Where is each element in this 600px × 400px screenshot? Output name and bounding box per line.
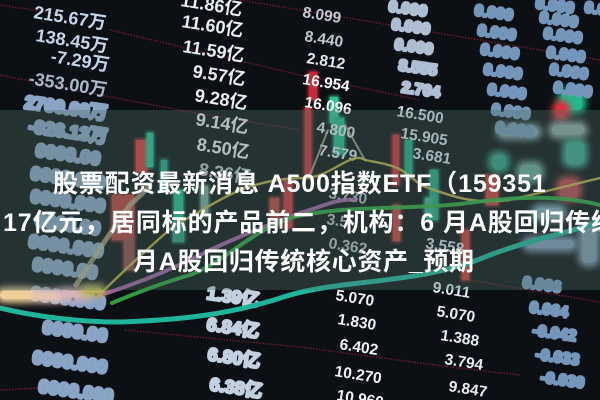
left column figures — [27, 2, 111, 100]
out-of-focus right column rows: 0.000 — [552, 79, 593, 101]
out-of-focus left column rows: 0000.00 — [34, 210, 102, 239]
third column figures: 10.270 — [333, 363, 383, 387]
third column figures: 8.440 — [303, 28, 344, 51]
out-of-focus left column rows: 0000.000 — [29, 163, 107, 193]
third column figures: 6.402 — [338, 336, 379, 359]
out-of-focus fourth column rows: 2.704 — [400, 79, 442, 101]
out-of-focus left column rows: 2700.00万 — [23, 92, 108, 124]
out-of-focus fourth column rows: 0.000 — [393, 36, 434, 58]
out-of-focus fourth column rows — [387, 0, 442, 101]
second column figures: 11.59亿 — [181, 36, 246, 66]
out-of-focus right column rows: 0.000 — [490, 101, 531, 123]
fourth column figures: 3.558 — [424, 235, 466, 258]
out-of-focus fourth column rows: 8.555 — [397, 57, 439, 79]
out-of-focus right column rows: -0.033 — [534, 346, 581, 369]
out-of-focus fourth column rows: 0.000 — [390, 16, 431, 38]
out-of-focus left column rows: 0000.000 — [29, 186, 107, 216]
out-of-focus right column rows: 0.000 — [545, 44, 586, 66]
out-of-focus right column rows: 0.000 — [476, 22, 517, 44]
left column figures: -7.29万 — [49, 46, 111, 75]
title text block — [3, 170, 600, 276]
lower fourth column figures: 1.388 — [439, 327, 481, 350]
out-of-focus right column rows: 0.000 — [473, 2, 514, 24]
out-of-focus left column rows: 0000.00 — [31, 254, 99, 283]
second column figures: 8.36亿 — [197, 159, 253, 187]
left column figures: 215.67万 — [32, 2, 108, 33]
out-of-focus left column rows: 0000.00 — [41, 317, 109, 346]
third column figures: 3.730 — [327, 185, 368, 208]
third column figures: 16.954 — [301, 71, 351, 95]
third column figures: 4.800 — [315, 119, 356, 142]
line: yellow — [98, 158, 600, 296]
left column figures: 138.45万 — [34, 25, 110, 56]
moving average lines — [0, 125, 600, 322]
lower fourth column figures: 9.011 — [431, 279, 472, 302]
second column figures: 9.14亿 — [194, 109, 250, 137]
third column figures: 2.812 — [305, 50, 346, 73]
line: tan — [76, 186, 150, 285]
lower fourth column figures: 3.794 — [443, 351, 485, 374]
out-of-focus left column rows: -926.13万 — [27, 116, 109, 147]
out-of-focus lower second column rows: 6.84亿 — [205, 314, 261, 341]
out-of-focus right column rows: 0.066 — [521, 274, 563, 296]
out-of-focus right column rows: -0.030 — [539, 369, 585, 392]
out-of-focus right column rows: 0.000 — [479, 41, 520, 63]
out-of-focus right column rows — [473, 0, 600, 392]
line: green — [112, 198, 600, 303]
translucent title band — [0, 110, 600, 290]
title line 3: 月A股回归传统核心资产_预期 — [133, 248, 475, 276]
out-of-focus lower second column rows: 1.39亿 — [205, 283, 261, 310]
out-of-focus right column rows: 0.064 — [528, 299, 570, 321]
out-of-focus lower second column rows: 6.80亿 — [206, 344, 262, 371]
third column figures: 5.070 — [334, 287, 375, 310]
out-of-focus right column rows: 0.000 — [494, 119, 535, 141]
third column figures: 1.830 — [336, 311, 377, 334]
third column figures — [301, 4, 385, 400]
second column figures — [179, 0, 253, 187]
out-of-focus left column rows: 0000.00 — [34, 140, 102, 169]
out-of-focus left column rows: 0000.000 — [27, 231, 105, 261]
title line 2 start: 17亿元，居同标的产品前二，机构：6 — [3, 209, 435, 237]
second column figures: 9.57亿 — [191, 61, 247, 89]
out-of-focus left column rows: 0000.000 — [29, 283, 107, 313]
out-of-focus right column rows: 0.000 — [486, 81, 527, 103]
out-of-focus right column rows: -0.042 — [531, 322, 577, 345]
lower fourth column figures — [431, 279, 488, 400]
second column figures: 11.60亿 — [180, 11, 245, 41]
third column figures: 3.5 — [325, 211, 350, 231]
lower fourth column figures: 5.070 — [435, 303, 476, 326]
line: teal — [0, 222, 600, 322]
out-of-focus right column rows: 0.000 — [538, 9, 579, 31]
line: tan steep — [310, 125, 365, 175]
out-of-focus right column rows: 0.000 — [542, 25, 583, 47]
second column figures: 8.50亿 — [195, 134, 251, 162]
out-of-focus right column rows: 0.000 — [482, 61, 523, 83]
fourth column figures: 3.681 — [411, 145, 453, 168]
fourth column figures — [395, 103, 466, 258]
third column figures: 8.099 — [301, 4, 343, 27]
third column figures: 0.362 — [327, 235, 368, 258]
out-of-focus left column rows — [23, 92, 115, 400]
third column figures: 7.579 — [317, 142, 359, 165]
third column figures: 16.096 — [303, 94, 353, 118]
out-of-focus lower second column rows — [205, 283, 264, 400]
line: purple — [100, 200, 355, 295]
out-of-focus left column rows: 0000.000 — [31, 347, 109, 377]
fourth column figures: 15.905 — [399, 125, 449, 149]
out-of-focus right column rows: 0.000 — [548, 61, 589, 83]
second column figures: 9.28亿 — [193, 85, 249, 113]
fourth column figures: 16.500 — [395, 103, 445, 127]
title line 1: 股票配资最新消息 A500指数ETF（159351 — [53, 170, 547, 198]
left column figures: -353.00万 — [27, 68, 109, 100]
